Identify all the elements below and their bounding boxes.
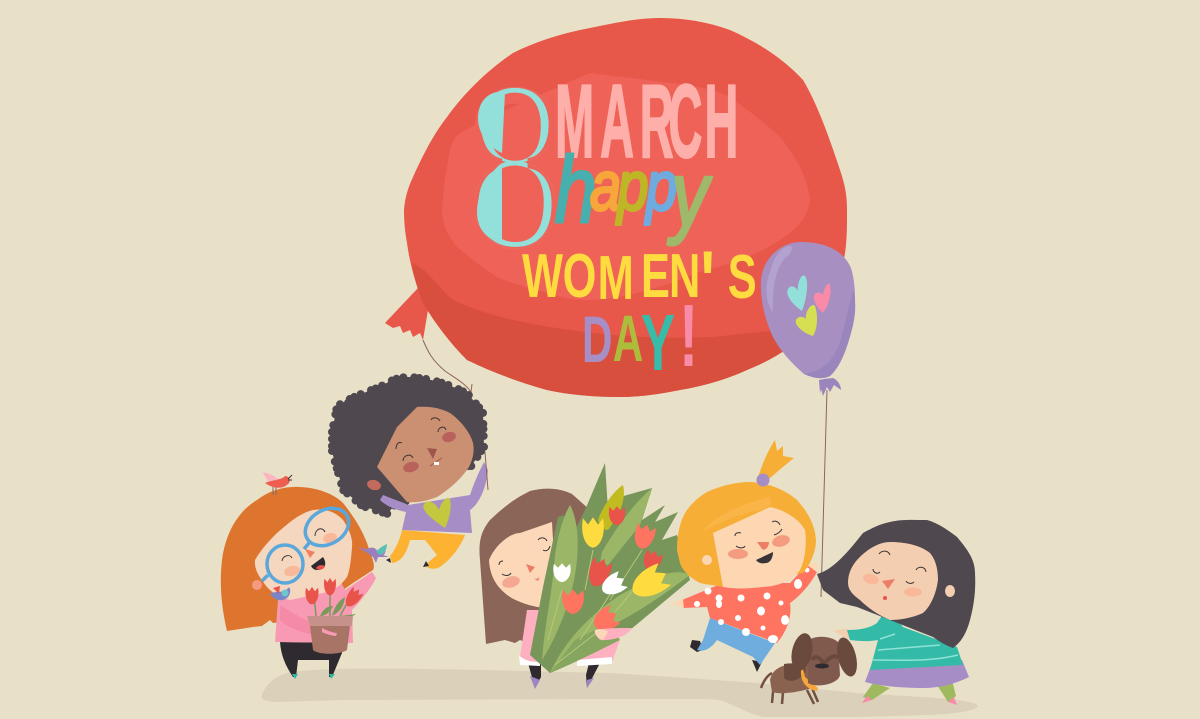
bouquet tulips (553, 506, 673, 635)
numeral 8: 8 (467, 34, 563, 302)
heading: Women's: M (598, 245, 634, 313)
heart on shirt (423, 498, 451, 528)
face (713, 507, 806, 588)
shirt (380, 462, 488, 533)
trousers (390, 530, 465, 569)
heading: happy: p (644, 148, 677, 225)
hair (677, 482, 816, 587)
girl with red hair and glasses (221, 472, 389, 679)
heading: Women's: N (669, 243, 700, 311)
heading: happy: p (615, 148, 648, 225)
heading: happy: y (667, 143, 712, 246)
heading: Women's: ' (700, 233, 715, 330)
purple balloon (761, 242, 855, 597)
glasses (262, 501, 355, 583)
balloon hearts (787, 275, 831, 336)
bird on head (263, 472, 292, 495)
face (377, 407, 474, 502)
polka dots (694, 568, 810, 643)
trousers (280, 642, 342, 677)
heading: Women's: S (728, 244, 757, 312)
hummingbird (358, 546, 389, 563)
dog (761, 631, 861, 704)
face (848, 542, 938, 620)
flower pot with tulips (305, 578, 364, 654)
illustration: women's day scene (220, 18, 978, 717)
ponytail (758, 440, 794, 478)
bird on shoulder (270, 586, 290, 600)
heading: happy: h (555, 138, 597, 243)
curly hair (332, 377, 484, 514)
heading: Women's: O (563, 243, 596, 311)
heading: Day!: Y (641, 299, 675, 388)
heading: 8 March (474, 83, 736, 249)
heading: Women's: W (522, 243, 563, 311)
word: March: MARCH (555, 64, 738, 180)
tulip bouquet (530, 463, 690, 673)
hair (817, 520, 975, 648)
heading: Day!: ! (679, 286, 698, 385)
numeral 8 half fills (477, 92, 505, 244)
heading: Women's: E (641, 243, 670, 311)
face (255, 509, 352, 600)
jumping girl with dark curly hair (332, 377, 488, 569)
shirt (275, 572, 376, 643)
girl with orange hair and polka dots (672, 440, 818, 672)
heading: Day!: D (582, 302, 613, 376)
girl with brown hair (479, 489, 620, 689)
heading: happy: a (590, 148, 621, 225)
heading: Day!: A (613, 301, 643, 375)
large red balloon (385, 18, 847, 397)
ground shadow (262, 669, 978, 717)
girl with black hair (817, 520, 975, 705)
